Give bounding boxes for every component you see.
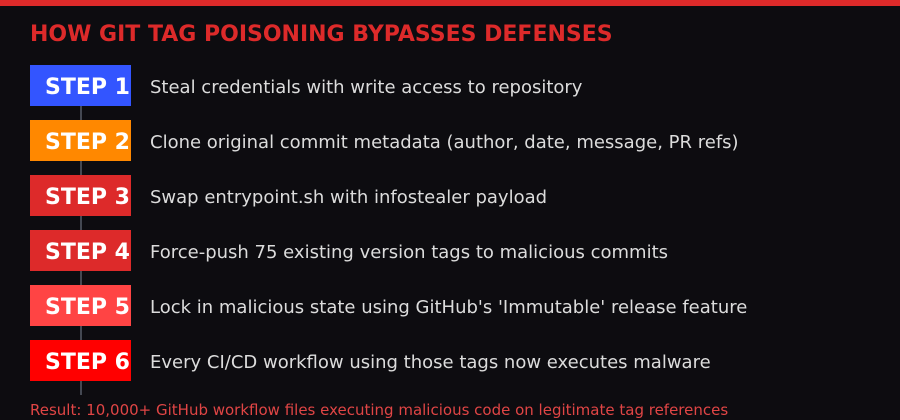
step 1: STEP 1 [45, 75, 130, 100]
footer result: Result: 10,000+ GitHub workflow files executing malicious code on legitimate tag references [30, 401, 728, 419]
step 6 [30, 340, 711, 381]
step 5: STEP 5 [45, 295, 130, 320]
step 4: STEP 4 [45, 240, 130, 265]
step 4: Force-push 75 existing version tags to malicious commits [150, 242, 668, 263]
step 4 [30, 230, 668, 271]
step 2: Clone original commit metadata (author, date, message, PR refs) [150, 132, 739, 153]
step 6: STEP 6 [45, 350, 130, 375]
step 5 [30, 285, 747, 326]
step 3: STEP 3 [45, 185, 130, 210]
title: HOW GIT TAG POISONING BYPASSES DEFENSES [30, 22, 613, 47]
step 2 [30, 120, 739, 161]
step 2: STEP 2 [45, 130, 130, 155]
step 6: Every CI/CD workflow using those tags now executes malware [150, 352, 711, 373]
step 5: Lock in malicious state using GitHub's 'Immutable' release feature [150, 297, 747, 318]
step 1: Steal credentials with write access to repository [150, 77, 582, 98]
step 3 [30, 175, 547, 216]
step 3: Swap entrypoint.sh with infostealer payload [150, 187, 547, 208]
step 1 [30, 65, 582, 106]
